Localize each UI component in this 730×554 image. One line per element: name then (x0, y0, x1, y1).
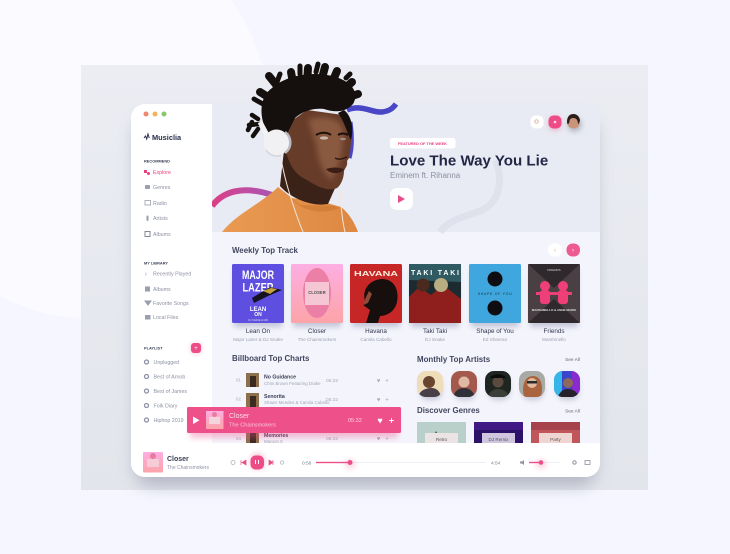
backdrop panel (81, 65, 648, 490)
album: Lean On: DJ SNAKE & MØ (248, 319, 268, 322)
artist 5 (554, 371, 580, 397)
album captions: Lean On (246, 328, 271, 335)
sidebar menu: recommend: Explore (153, 170, 171, 176)
chart row 1: 05:32 (326, 378, 338, 384)
now playing bar: The Chainsmokers (229, 422, 276, 428)
chart row 1 (236, 373, 389, 387)
album: Closer: CLOSER (308, 290, 326, 295)
chart row 2: Shawn Mendes & Camila Cabello (264, 400, 330, 405)
window shadow (135, 118, 596, 486)
carousel buttons: ‹ (554, 248, 556, 254)
chart row 2: ♥ (377, 398, 381, 404)
chart row 4: 04 (236, 436, 241, 441)
sidebar menu: recommend: Artists (153, 216, 168, 222)
now playing bar (187, 407, 401, 433)
sidebar menu: library: ♪ (144, 272, 148, 278)
progress bar: 4:54 (491, 460, 501, 466)
window dots (144, 112, 166, 116)
album: Friends: MARSHMELLO & ANNE-MARIE (532, 308, 576, 312)
player track title: Closer (167, 456, 189, 463)
album: Friends: FRIENDS (547, 268, 561, 272)
album: Friends (528, 264, 580, 323)
hero portrait (222, 64, 358, 232)
chart row 4: Memories (264, 433, 288, 439)
chart row 1: No Guidance (264, 374, 296, 380)
genre: Party: Party (550, 437, 562, 442)
hero subtitle: Eminem ft. Rihanna (390, 171, 461, 180)
album captions: Camila Cabello (360, 337, 392, 342)
sidebar menu: library: Favorite Songs (153, 301, 189, 307)
sidebar menu: playlist (144, 343, 201, 424)
settings icon (573, 461, 576, 464)
album: Havana (350, 264, 402, 323)
chart row 2: 02 (236, 396, 241, 402)
album: Closer (291, 264, 343, 323)
sidebar menu: recommend: Genres (153, 185, 171, 191)
now playing bar shadow (190, 414, 398, 438)
chart row 1: + (385, 378, 389, 384)
cable (281, 157, 345, 232)
chart row 4: + (385, 436, 389, 442)
genre: DJ Remix (474, 422, 523, 446)
album: Havana: HAVANA (354, 269, 399, 278)
shirt (222, 187, 358, 232)
weekly heading: Weekly Top Track (232, 246, 299, 255)
logo: Musiclia (152, 133, 182, 142)
album: Lean On (232, 264, 284, 323)
chart row 1: ♥ (377, 378, 381, 384)
album: Lean On: LEAN (250, 307, 266, 313)
album captions: DJ Snake (425, 337, 445, 342)
chart row 4: Maroon 5 (264, 439, 283, 444)
chart row 2: + (385, 398, 389, 404)
album: Lean On: MAJOR (242, 268, 274, 282)
album captions: Friends (544, 328, 564, 335)
chart row 1: Chris Brown Featuring Drake (264, 381, 321, 386)
artist 4 (519, 371, 545, 397)
genres heading: Discover Genres (417, 406, 480, 415)
sidebar menu: playlist: Unplugged (154, 360, 179, 366)
sidebar menu: playlist: Best of Arnob (154, 374, 185, 380)
charts heading: Billboard Top Charts (232, 354, 310, 363)
album captions (233, 328, 566, 342)
player track artist: The Chainsmokers (167, 465, 209, 471)
sidebar menu: library: Recently Played (153, 272, 191, 278)
sidebar menu: library: Albums (153, 287, 171, 293)
album: Lean On: LAZER (242, 280, 274, 294)
sidebar menu: playlist: + (194, 346, 198, 352)
playback controls (231, 454, 284, 470)
album captions: Shape of You (476, 328, 514, 335)
album captions: Marshmello (542, 337, 566, 342)
genre: Party (531, 422, 580, 446)
player bar (131, 443, 600, 477)
hero background (212, 104, 600, 232)
album captions: Closer (308, 328, 326, 335)
screen icon (585, 460, 590, 464)
now playing bar: + (389, 416, 394, 426)
album captions: Major Lazer & DJ Snake (233, 337, 283, 342)
chart row 4: 05:32 (326, 436, 338, 442)
progress bar: 0:58 (302, 460, 312, 466)
sidebar menu: library: Local Files (153, 315, 179, 321)
headphone (264, 130, 290, 156)
volume (520, 459, 560, 469)
chart row 1: 01 (236, 378, 241, 382)
chart row 4 (236, 432, 389, 444)
album: Shape of You: SHAPE OF YOU (478, 292, 512, 296)
chart row 2: 05:32 (326, 397, 338, 403)
hero tag: FEATURED OF THE WEEK (398, 141, 447, 146)
carousel buttons (548, 244, 580, 256)
hero swooshes (212, 104, 396, 206)
face highlights (308, 117, 344, 180)
chart row 2 (236, 393, 389, 407)
top action buttons (530, 114, 581, 131)
hero play button (390, 188, 413, 210)
player thumbnail (143, 452, 163, 472)
hero tag (390, 138, 456, 148)
sidebar (131, 104, 212, 477)
hair (261, 74, 355, 140)
chart list (236, 373, 389, 444)
artist 2 (451, 371, 477, 397)
sidebar menu: playlist: Folk Diary (154, 404, 178, 410)
neck (280, 152, 335, 205)
album captions: Ed Sheeran (483, 337, 508, 342)
album: Lean On: ON (254, 312, 262, 318)
genre: Retro (417, 422, 466, 446)
artists see all: See All (565, 357, 580, 363)
sidebar menu: recommend: Albums (153, 232, 171, 238)
album captions: Taki Taki (423, 328, 447, 335)
sidebar menu: recommend (144, 158, 171, 238)
sidebar menu: library: MY LIBRARY (144, 260, 168, 266)
genre: Retro: Retro (436, 437, 448, 442)
hero title: Love The Way You Lie (390, 152, 548, 170)
genre: DJ Remix: DJ Remix (489, 437, 509, 442)
artists heading: Monthly Top Artists (417, 355, 491, 364)
artist 3 (485, 371, 511, 397)
artist 1 (417, 371, 443, 397)
now playing thumbnail (206, 411, 224, 429)
album captions: Havana (365, 328, 387, 335)
collar shade (292, 198, 340, 212)
now playing bar: 05:32 (348, 418, 362, 424)
sidebar menu: playlist: Best of James (154, 389, 187, 395)
sidebar menu: library (144, 260, 191, 321)
hair band (260, 122, 267, 135)
carousel buttons: › (572, 248, 574, 254)
sidebar menu: playlist: Hiphop 2019 (154, 418, 184, 424)
genres see all: See All (565, 408, 580, 414)
now playing bar: ♥ (377, 416, 383, 426)
chart row 2: Senorita (264, 394, 285, 400)
sidebar menu: recommend: RECOMMEND (144, 158, 170, 164)
app window (131, 104, 600, 477)
progress bar (302, 459, 501, 469)
album: Taki Taki (409, 264, 461, 323)
artist avatars (417, 371, 580, 400)
album shadows (234, 270, 578, 327)
chart row 4: ♥ (377, 436, 381, 442)
hero decorative curve (440, 160, 500, 232)
sidebar menu: recommend: Radio (153, 201, 167, 207)
now playing bar: Closer (229, 413, 250, 420)
face (283, 110, 351, 189)
album: Shape of You (469, 264, 521, 323)
album: Taki Taki: TAKI TAKI (411, 270, 459, 277)
album captions: The Chainsmokers (298, 337, 337, 342)
sidebar menu: playlist: PLAYLIST (144, 346, 163, 350)
